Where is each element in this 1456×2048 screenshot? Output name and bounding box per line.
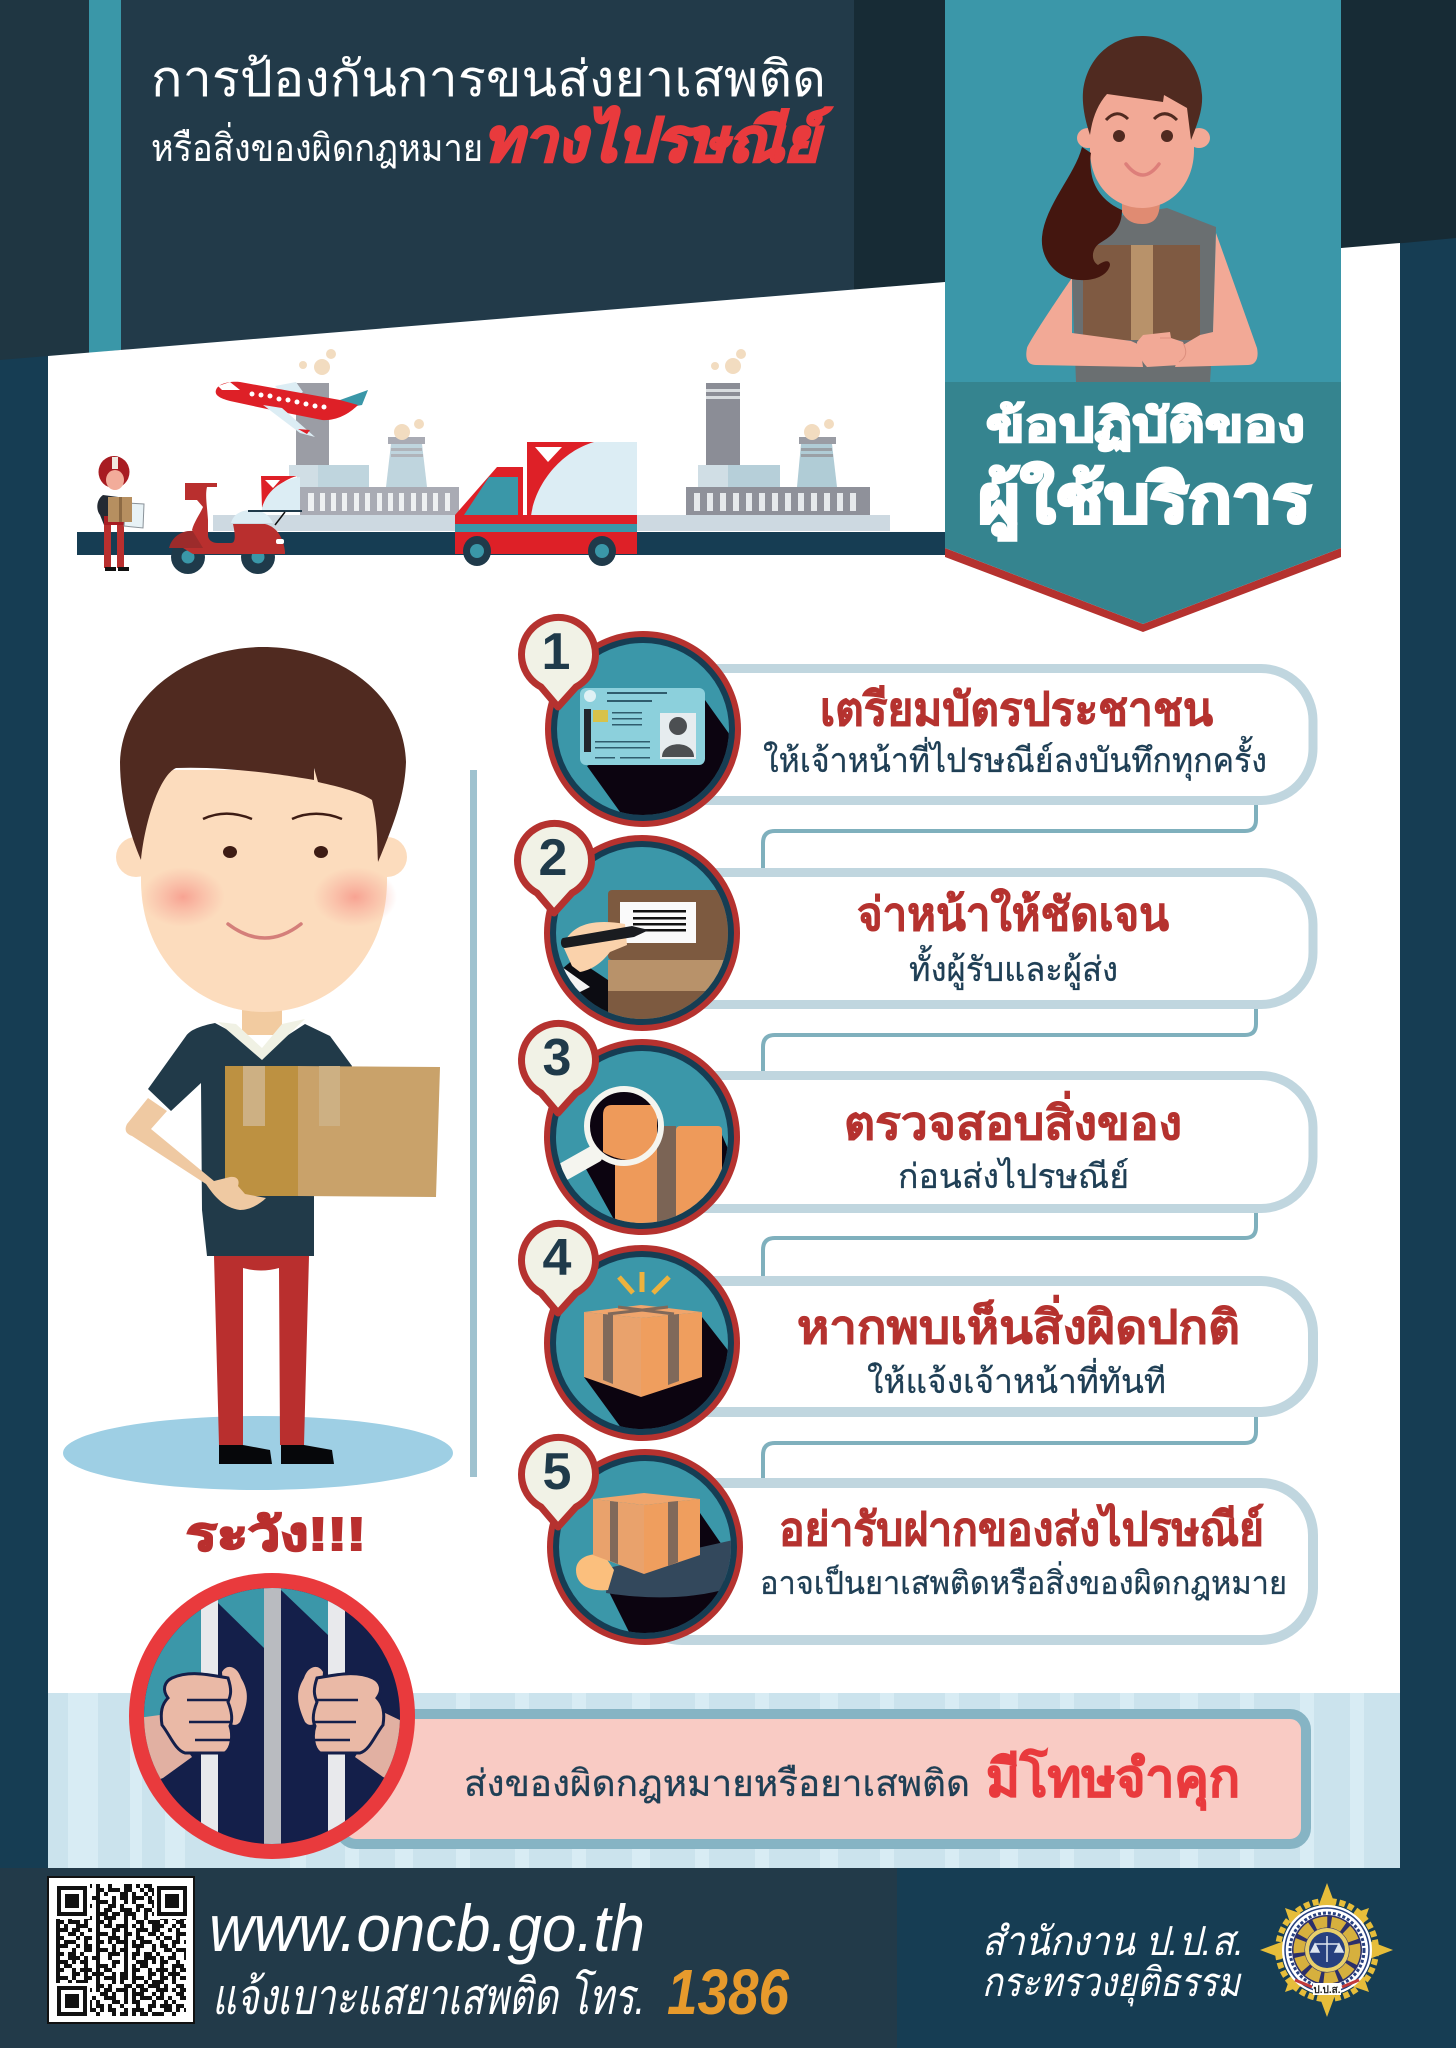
- step heading: ตรวจสอบสิ่งของ: [844, 1091, 1182, 1149]
- card: [630, 872, 1313, 1004]
- step heading: อย่ารับฝากของส่งไปรษณีย์: [779, 1503, 1264, 1555]
- agency seal: [1260, 1883, 1393, 2017]
- icon: suspicious parcel: [544, 1245, 740, 1441]
- icon: addressing a parcel: [544, 835, 740, 1035]
- illustration: woman holding parcel: [1026, 36, 1258, 382]
- penalty text: มีโทษจำคุก: [986, 1747, 1240, 1811]
- step 3: [521, 1023, 1313, 1240]
- card: [630, 1281, 1313, 1412]
- white sheet: [48, 243, 1400, 1868]
- step description: อาจเป็นยาเสพติดหรือสิ่งของผิดกฎหมาย: [760, 1561, 1287, 1601]
- step description: ก่อนส่งไปรษณีย์: [898, 1157, 1129, 1196]
- step description: ให้เจ้าหน้าที่ไปรษณีย์ลงบันทึกทุกครั้ง: [763, 736, 1267, 781]
- icon: ID card: [545, 631, 741, 830]
- banner heading: ข้อปฏิบัติของ: [986, 399, 1305, 451]
- road: [77, 532, 945, 555]
- banner ribbon: [945, 548, 1341, 632]
- number badge 1: [521, 617, 596, 707]
- agency seal: ป.ป.ส.: [1313, 1984, 1341, 1996]
- illustration: man holding box: [63, 647, 453, 1490]
- card: [630, 668, 1313, 800]
- icon: magnifier over parcel: [544, 1039, 740, 1240]
- header band: [0, 0, 1456, 360]
- number badge 4: 4: [543, 1229, 572, 1287]
- step heading: จ่าหน้าให้ชัดเจน: [857, 887, 1170, 940]
- number badge 5: 5: [543, 1443, 571, 1501]
- step description: ให้แจ้งเจ้าหน้าที่ทันที: [867, 1358, 1166, 1401]
- step 5: [521, 1437, 1313, 1645]
- QR code: [47, 1876, 195, 2024]
- warning heading: ระวัง!!!: [186, 1508, 366, 1560]
- penalty box: [340, 1714, 1306, 1844]
- card: [630, 1076, 1313, 1208]
- number badge 3: 3: [543, 1029, 571, 1087]
- title: หรือสิ่งของผิดกฎหมาย: [151, 122, 483, 170]
- scooter: [169, 476, 302, 574]
- penalty text: [464, 1747, 1240, 1811]
- step 1: [521, 617, 1313, 830]
- panel: penalty strip: [48, 1693, 1400, 1868]
- title: ทางไปรษณีย์: [483, 106, 832, 174]
- vertical divider: [470, 770, 477, 1477]
- truck: [455, 442, 637, 566]
- icon: hand passing parcel: [547, 1449, 745, 1645]
- number badge 4: [521, 1223, 596, 1313]
- number badge 3: [521, 1023, 596, 1113]
- agency name: [982, 1920, 1244, 2007]
- step 2: [518, 823, 1313, 1035]
- transport illustration: [77, 349, 945, 574]
- number badge 2: [518, 823, 591, 913]
- panel: footer: [0, 1868, 1456, 2048]
- title: [151, 51, 832, 174]
- number badge 5: [521, 1437, 596, 1527]
- plane: [216, 382, 368, 437]
- delivery person: [97, 456, 144, 571]
- card: [630, 1483, 1313, 1640]
- hotline text: 1386: [667, 1956, 789, 2028]
- number badge 2: 2: [539, 829, 567, 887]
- agency name: สำนักงาน ป.ป.ส.: [982, 1920, 1244, 1964]
- step 4: [521, 1223, 1313, 1441]
- step description: ทั้งผู้รับและผู้ส่ง: [909, 945, 1118, 990]
- hotline text: แจ้งเบาะแสยาเสพติด โทร.: [212, 1968, 645, 2025]
- banner heading: ผู้ใช้บริการ: [978, 460, 1311, 541]
- banner heading: [978, 399, 1311, 541]
- connectors between steps: [763, 805, 1256, 1480]
- step heading: หากพบเห็นสิ่งผิดปกติ: [797, 1295, 1240, 1353]
- website: www.oncb.go.th: [209, 1891, 645, 1965]
- factories: [213, 349, 890, 531]
- penalty text: ส่งของผิดกฎหมายหรือยาเสพติด: [464, 1763, 970, 1804]
- agency name: กระทรวงยุติธรรม: [982, 1961, 1242, 2007]
- icon: hands behind prison bars: [129, 1570, 420, 1870]
- number badge 1: 1: [542, 623, 570, 681]
- step heading: เตรียมบัตรประชาชน: [820, 683, 1214, 735]
- panel: service user banner: [945, 0, 1341, 632]
- title: การป้องกันการขนส่งยาเสพติด: [151, 51, 826, 107]
